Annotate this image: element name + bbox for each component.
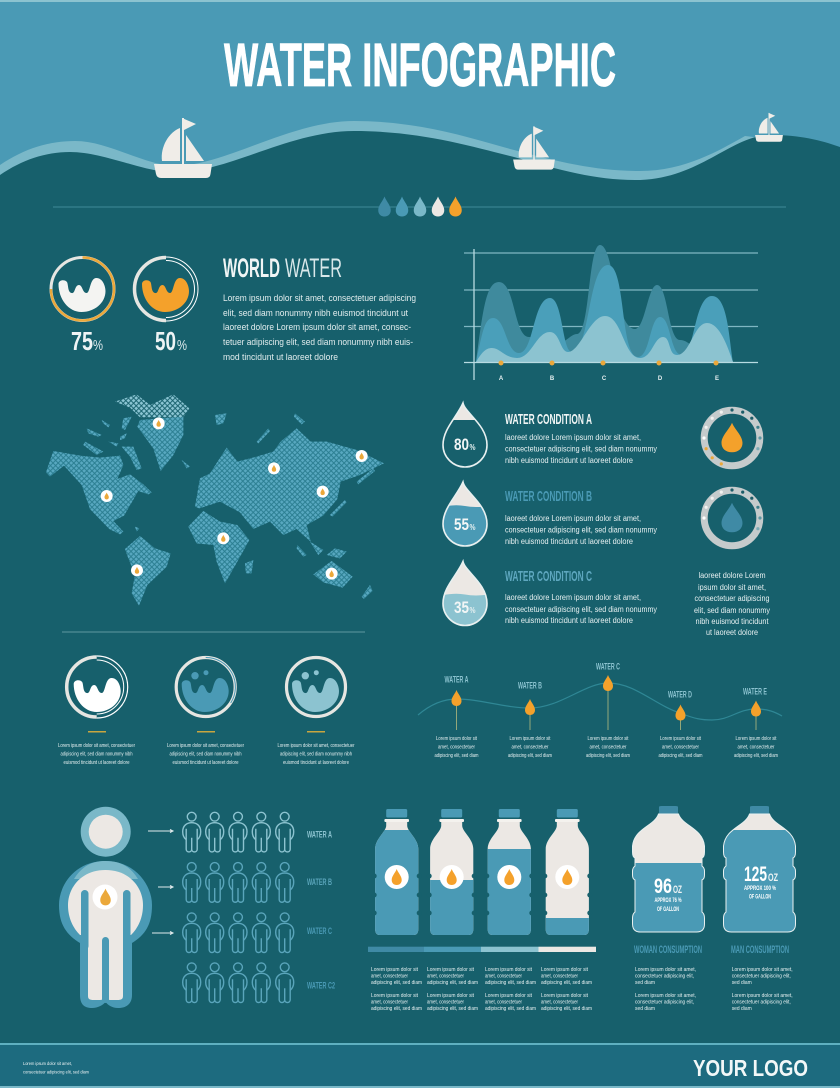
text columns under bottles: amet, consectetuer [485, 974, 522, 980]
panel: white water gauge [58, 656, 135, 766]
drop gauge 80 percent: % [470, 443, 476, 452]
timeline node D: amet, consectetuer [662, 744, 699, 750]
body B [505, 514, 657, 546]
text block: woman consumption: sed diam [635, 1006, 656, 1012]
timeline node C: WATER C [596, 662, 620, 672]
drop gauge 55 percent: 55 [454, 516, 469, 534]
text columns under bottles: adipiscing elit, sed diam [427, 980, 479, 986]
timeline node C: amet, consectetuer [590, 744, 627, 750]
timeline node A [434, 674, 479, 759]
text columns under bottles: adipiscing elit, sed diam [541, 1006, 593, 1012]
panel: pale water gauge: Lorem ipsum dolor sit amet, consectetuer [278, 743, 355, 749]
text columns under bottles: amet, consectetuer [541, 974, 578, 980]
map pin: Russia [268, 462, 280, 474]
heading A: WATER CONDITION A [505, 411, 592, 428]
text block: world water: tetuer adipiscing elit, sed diam nonummy nibh euis- [223, 337, 413, 347]
drop gauge 80 percent [441, 402, 489, 467]
panel: pale water gauge: adipiscing elit, sed diam nonummy nibh [280, 752, 352, 758]
water jug: man consumption [722, 806, 796, 933]
water jug: man consumption: 125 [744, 863, 767, 886]
text columns under bottles: adipiscing elit, sed diam [541, 980, 593, 986]
text columns under bottles: amet, consectetuer [371, 974, 408, 980]
text columns under bottles [371, 967, 593, 1012]
water jug: woman consumption [632, 806, 706, 933]
timeline node E: amet, consectetuer [738, 744, 775, 750]
panel: white water gauge: Lorem ipsum dolor sit amet, consectetuer [58, 743, 135, 749]
panel: pale water gauge: euismod tincidunt ut laoreet dolore [283, 760, 349, 766]
gauge 50 percent: % [177, 337, 187, 354]
map pin: Africa [217, 532, 229, 544]
icon: medium sailboat [513, 126, 555, 170]
timeline node B: adipiscing elit, sed diam [508, 753, 552, 759]
map pin: Australia [326, 568, 338, 580]
gauge 50 percent [134, 257, 198, 356]
timeline node B [508, 680, 552, 759]
body A: nibh euismod tincidunt ut laoreet dolore [505, 456, 633, 465]
water jug: woman consumption: 96 [654, 875, 672, 898]
people row B [183, 863, 294, 902]
heading: world water: WATER [285, 253, 342, 283]
heading C: WATER CONDITION C [505, 568, 592, 585]
label water C: WATER C [307, 926, 332, 936]
icon: large person [59, 807, 152, 1008]
text block: world water: mod tincidunt ut laoreet dolore [223, 352, 338, 362]
bottle 3 [488, 809, 531, 935]
text block: woman consumption: sed diam [635, 980, 656, 986]
icon: large sailboat [154, 118, 212, 178]
area chart: C [602, 376, 607, 382]
heading B: WATER CONDITION B [505, 488, 592, 505]
panel: blue water gauge: euismod tincidunt ut laoreet dolore [172, 760, 239, 766]
timeline node D: Lorem ipsum dolor sit [660, 736, 701, 742]
water jug: man consumption: OF GALLON [749, 894, 771, 900]
text columns under bottles: Lorem ipsum dolor sit [485, 993, 532, 999]
text block under dials: ipsum dolor sit amet, [698, 583, 766, 592]
text columns under bottles: Lorem ipsum dolor sit [485, 967, 532, 973]
label water C2: WATER C2 [307, 980, 335, 990]
text block: woman consumption: consectetuer adipiscing elit, [635, 974, 694, 980]
timeline node C: adipiscing elit, sed diam [586, 753, 630, 759]
footer text: consectetuer adipiscing elit, sed diam [23, 1070, 89, 1074]
area chart [464, 245, 758, 382]
drop gauge 35 percent: % [470, 606, 476, 615]
water jug: man consumption: OZ [768, 872, 778, 884]
gauge 75 percent [51, 258, 114, 356]
panel: pale water gauge [278, 658, 355, 766]
body C [505, 593, 657, 625]
drop gauge 80 percent: 80 [454, 436, 469, 454]
panel: blue water gauge [167, 657, 244, 766]
icon: orange drop dial [702, 408, 762, 466]
panel: water condition A [441, 402, 657, 467]
text block: woman consumption: Lorem ipsum dolor sit amet, [635, 967, 696, 973]
text columns under bottles: amet, consectetuer [427, 974, 464, 980]
logo: YOUR LOGO [693, 1055, 808, 1081]
body B: consectetuer adipiscing elit, sed diam nonummy [505, 526, 657, 534]
text block: world water [223, 293, 416, 362]
text block: man consumption [731, 944, 793, 1012]
timeline node E: adipiscing elit, sed diam [734, 753, 778, 759]
text columns under bottles: amet, consectetuer [485, 1000, 522, 1006]
text block under dials: consectetuer adipiscing [694, 594, 770, 603]
text block: man consumption: Lorem ipsum dolor sit amet, [732, 967, 793, 973]
body A: consectetuer adipiscing elit, sed diam nonummy [505, 444, 657, 454]
panel: water condition C [441, 562, 657, 628]
text block under dials [694, 571, 770, 637]
map pin: Far East [356, 450, 368, 462]
text columns under bottles: Lorem ipsum dolor sit [427, 967, 474, 973]
divider with five drops [53, 196, 786, 216]
panel: blue water gauge: Lorem ipsum dolor sit amet, consectetuer [167, 743, 244, 749]
text columns under bottles: amet, consectetuer [541, 1000, 578, 1006]
body C: consectetuer adipiscing elit, sed diam nonummy [505, 605, 657, 614]
text block: man consumption: sed diam [732, 1006, 752, 1012]
body B: laoreet dolore Lorem ipsum dolor sit amet, [505, 514, 641, 523]
area chart: E [715, 376, 719, 382]
text block: man consumption: sed diam [732, 980, 752, 986]
bottle 2 [430, 809, 474, 935]
text columns under bottles: Lorem ipsum dolor sit [541, 967, 588, 973]
arrow to row C [152, 932, 173, 934]
panel: white water gauge: adipiscing elit, sed diam nonummy nibh [60, 752, 133, 758]
text block under dials: ut laoreet dolore [706, 628, 758, 637]
dotted world map [40, 385, 390, 610]
drop gauge 35 percent: 35 [454, 599, 469, 617]
text block: woman consumption: Lorem ipsum dolor sit amet, [635, 993, 696, 999]
text columns under bottles: Lorem ipsum dolor sit [541, 993, 588, 999]
footer text [23, 1061, 89, 1074]
text block: man consumption: Lorem ipsum dolor sit amet, [732, 993, 793, 999]
footer band [0, 1043, 840, 1088]
text columns under bottles: adipiscing elit, sed diam [427, 1006, 479, 1012]
icon: small sailboat [755, 113, 783, 142]
bottle 1 [375, 809, 418, 935]
text block under dials: elit, sed diam nonummy [694, 606, 770, 615]
text block: man consumption: consectetuer adipiscing elit, [732, 1000, 791, 1006]
text columns under bottles: amet, consectetuer [427, 1000, 464, 1006]
timeline node D [658, 690, 703, 759]
gauge 75 percent: 75 [71, 326, 93, 356]
label water A: WATER A [307, 830, 332, 840]
arrow to row A [148, 830, 173, 832]
timeline node E: Lorem ipsum dolor sit [736, 736, 777, 742]
body A [505, 433, 657, 465]
text block: woman consumption [634, 944, 702, 1012]
drop gauge 55 percent: % [470, 523, 476, 532]
timeline node B: Lorem ipsum dolor sit [510, 736, 551, 742]
gauge 50 percent: 50 [155, 326, 176, 356]
timeline node A: adipiscing elit, sed diam [434, 753, 479, 759]
text block: woman consumption: consectetuer adipiscing elit, [635, 1000, 694, 1006]
body A: laoreet dolore Lorem ipsum dolor sit amet, [505, 433, 641, 442]
panel: white water gauge: euismod tincidunt ut laoreet dolore [64, 760, 130, 766]
timeline node A: Lorem ipsum dolor sit [436, 736, 477, 742]
text block: world water: elit, sed diam nonummy nibh euismod tincidunt ut [223, 308, 408, 318]
bottle 4 [546, 809, 589, 935]
map pin: China [317, 486, 329, 498]
text block: world water: laoreet dolore Lorem ipsum dolor sit amet, consec- [223, 322, 411, 332]
text columns under bottles: adipiscing elit, sed diam [485, 980, 537, 986]
map pin: South America [131, 564, 143, 576]
area chart: B [550, 376, 555, 382]
timeline node E: WATER E [743, 686, 767, 696]
text columns under bottles: adipiscing elit, sed diam [371, 980, 423, 986]
area chart: A [499, 376, 504, 382]
water jug: woman consumption: OZ [673, 884, 682, 896]
text block under dials: nibh euismod tincidunt [696, 617, 769, 626]
timeline node A: amet, consectetuer [438, 744, 475, 750]
body C: nibh euismod tincidunt ut laoreet dolore [505, 616, 633, 625]
drop gauge 35 percent [441, 562, 489, 628]
water jug: woman consumption: APPROX 76 % [654, 897, 682, 904]
timeline node A: WATER A [444, 674, 469, 684]
text block: world water: Lorem ipsum dolor sit amet, consectetuer adipiscing [223, 293, 416, 303]
timeline node B: amet, consectetuer [512, 744, 549, 750]
map pin: Greenland [153, 417, 165, 429]
segmented colour bar [368, 947, 596, 952]
water jug: woman consumption: OF GALLON [657, 906, 679, 913]
body B: nibh euismod tincidunt ut laoreet dolore [505, 537, 633, 546]
footer text: Lorem ipsum dolor sit amet, [23, 1061, 72, 1066]
text block: man consumption: MAN CONSUMPTION [731, 944, 789, 956]
heading: world water: WORLD [223, 253, 280, 283]
body C: laoreet dolore Lorem ipsum dolor sit amet, [505, 593, 641, 602]
people row C2 [183, 963, 294, 1003]
panel: blue water gauge: adipiscing elit, sed diam nonummy nibh [170, 752, 242, 758]
timeline node B: WATER B [518, 680, 542, 690]
text block under dials: laoreet dolore Lorem [698, 571, 766, 580]
text columns under bottles: adipiscing elit, sed diam [371, 1006, 423, 1012]
icon: blue drop dial [702, 488, 762, 546]
timeline node E [734, 686, 778, 759]
text columns under bottles: amet, consectetuer [371, 1000, 408, 1006]
timeline node C [586, 662, 630, 759]
text columns under bottles: Lorem ipsum dolor sit [427, 993, 474, 999]
timeline node C: Lorem ipsum dolor sit [588, 736, 629, 742]
label water B: WATER B [307, 877, 332, 887]
header band with waves [0, 0, 840, 300]
text columns under bottles: Lorem ipsum dolor sit [371, 967, 418, 973]
panel: wave timeline [418, 662, 782, 759]
text block: woman consumption: WOMAN CONSUMPTION [634, 944, 702, 956]
drop gauge 55 percent [441, 482, 489, 548]
text columns under bottles: Lorem ipsum dolor sit [371, 993, 418, 999]
timeline node D: WATER D [668, 690, 692, 700]
text columns under bottles: adipiscing elit, sed diam [485, 1006, 537, 1012]
panel: water condition B [441, 482, 657, 548]
people row C [183, 913, 294, 953]
map pin: North America [101, 490, 113, 502]
arrow to row B [158, 886, 173, 888]
water jug: man consumption: APPROX 100 % [744, 885, 776, 892]
text block: man consumption: consectetuer adipiscing elit, [732, 974, 791, 980]
gauge 75 percent: % [93, 337, 103, 354]
people row A [183, 812, 294, 852]
area chart: D [658, 376, 663, 382]
timeline node D: adipiscing elit, sed diam [658, 753, 703, 759]
